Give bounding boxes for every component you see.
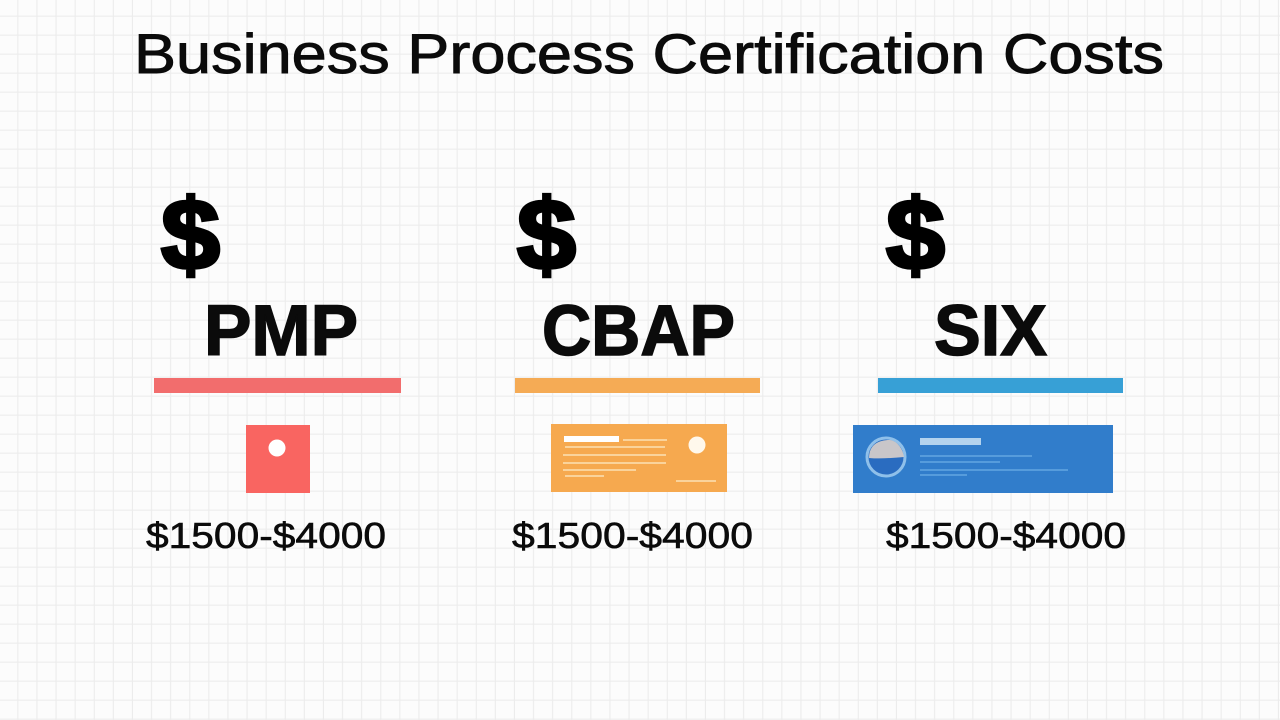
panel: PMP <box>146 179 401 556</box>
CBAP orange cost card <box>551 424 727 492</box>
title: Business Process Certification Costs <box>134 22 1164 85</box>
PMP red cost card <box>246 425 310 493</box>
heading: SIX: SIX <box>934 292 1047 371</box>
heading: PMP: PMP <box>204 292 358 371</box>
panel: SIX <box>853 179 1126 556</box>
icon: PMP dollar sign: $ <box>161 179 220 291</box>
SIX blue cost card <box>853 425 1113 493</box>
CBAP price: $1500-$4000 <box>512 515 753 556</box>
SIX price: $1500-$4000 <box>886 515 1126 556</box>
icon: SIX dollar sign: $ <box>886 179 945 291</box>
icon: CBAP dollar sign: $ <box>517 179 576 291</box>
CBAP orange bar <box>515 378 760 393</box>
SIX blue bar <box>878 378 1123 393</box>
PMP red bar <box>154 378 401 393</box>
PMP price: $1500-$4000 <box>146 515 386 556</box>
heading: CBAP: CBAP <box>542 292 735 371</box>
panel: CBAP <box>512 179 760 556</box>
